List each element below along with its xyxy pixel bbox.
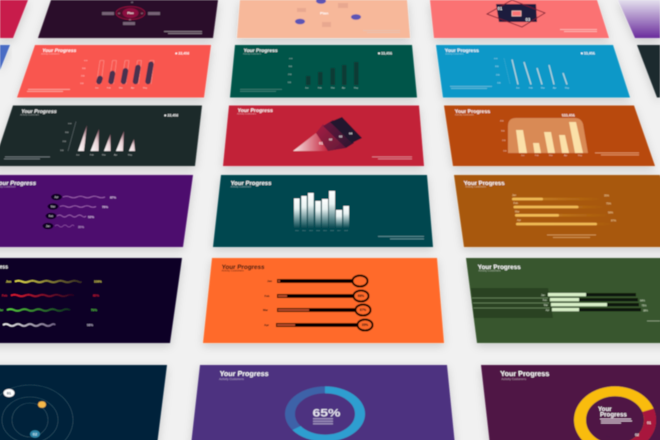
heading: Your Progress: [21, 109, 57, 115]
bar chart on rounded panel: Feb: [535, 155, 540, 157]
bar chart: 200: [288, 74, 292, 76]
value: $33,456: [561, 114, 575, 117]
panel: plum donut slide: [481, 365, 660, 440]
axis labels: 2015: [323, 230, 327, 232]
footnote: [164, 31, 202, 34]
heading: Activity Customers: [478, 269, 501, 272]
month pills: Mar: [51, 204, 55, 208]
donut value: 65%: [312, 408, 341, 420]
horizontal bars: 38%: [643, 310, 649, 312]
navy square with diamond outline: 01: [498, 6, 503, 11]
bar chart on rounded panel: 100: [503, 150, 507, 152]
bar chart: [80, 60, 154, 90]
month pills: Apr: [54, 195, 59, 199]
cone chart: Mar: [102, 154, 106, 156]
heading: Your Progress: [219, 369, 269, 378]
bar chart: 200: [81, 76, 85, 78]
cone chart: Jan: [76, 154, 80, 156]
panel: violet donut slide: [191, 365, 455, 440]
panel: ochre horizontal bars slide: [454, 175, 660, 247]
panel: purple wave slide: [0, 175, 193, 247]
value: ■ 33,456: [580, 52, 595, 55]
bar chart: 100: [288, 82, 292, 84]
footnote: [560, 29, 597, 32]
planets: 02: [33, 432, 38, 436]
bar chart on rounded panel: 300: [501, 130, 505, 132]
percentages: 52%: [88, 215, 94, 219]
horizontal bar chart: Apr: [517, 218, 521, 222]
heading: Your Progress: [445, 48, 479, 54]
lollipop bars: 35%: [362, 323, 368, 327]
cone chart: May: [128, 154, 133, 156]
lollipop bars: 68%: [358, 294, 364, 298]
bar chart on rounded panel: 200: [502, 140, 506, 142]
radial diagram: [102, 2, 160, 25]
bar chart: 400: [289, 58, 293, 60]
lollipop bars: Jan: [267, 279, 272, 283]
month pills: Feb: [49, 214, 54, 218]
footnote: [547, 234, 596, 238]
radial diagram: 02: [141, 13, 143, 15]
bar chart: Mar: [119, 86, 123, 90]
yellow and red donut: [580, 391, 650, 440]
value: ■ 33,456: [164, 114, 179, 117]
cone chart: Apr: [114, 154, 118, 156]
heading: Activity Customers: [237, 113, 257, 115]
panel: coral bar chart slide: [17, 45, 211, 98]
bar chart: Feb: [107, 88, 112, 90]
radial diagram: Plan: [127, 11, 134, 15]
layered triangle diagram: 03: [339, 134, 343, 138]
segment numbers: 01: [647, 421, 651, 425]
wave chart: [55, 196, 105, 227]
panel: plum radial slide: [38, 0, 218, 38]
footnote: [378, 236, 424, 239]
horizontal bars: [471, 288, 649, 318]
heading: Activity Customers: [221, 269, 245, 272]
heading: Your Progress: [243, 48, 278, 54]
thin bar chart: [494, 58, 570, 90]
donut chart 65 percent: [290, 390, 360, 438]
thin bar chart: 200: [496, 74, 500, 76]
segment numbers: 02: [635, 433, 639, 437]
axis labels: 2012: [302, 230, 306, 232]
bar chart: May: [354, 88, 359, 90]
bar chart on rounded panel: [500, 118, 588, 157]
footnote: [647, 320, 660, 322]
panel: salmon diamond slide: [430, 0, 609, 38]
heading: Your Progress: [230, 181, 272, 187]
horizontal bar chart: 87%: [611, 218, 617, 222]
bar chart on rounded panel: 400: [500, 120, 504, 122]
layered triangle diagram: 02: [329, 138, 333, 142]
axis labels: [295, 230, 348, 232]
radial diagram: 01: [129, 20, 131, 22]
bar chart: May: [143, 88, 148, 90]
layered triangle diagram: 04: [349, 132, 353, 136]
panel: crimson triangle slide: [223, 106, 424, 166]
panel: orange lollipop slide: [203, 258, 444, 343]
bar chart: Jan: [95, 88, 99, 90]
bar chart on rounded panel: Mar: [549, 154, 553, 157]
lollipop bars: Mar: [263, 308, 269, 312]
panel: cyan thin bar slide: [436, 45, 630, 98]
value: ■ 33,456: [175, 52, 190, 55]
value: ■ 33,456: [378, 52, 392, 55]
horizontal bar chart: 58%: [608, 210, 614, 214]
horizontal bars: 64%: [640, 300, 646, 302]
heading: Activity Customers: [230, 186, 252, 188]
panel: dark cone chart slide: [0, 106, 202, 166]
labels: [0, 280, 102, 327]
navy square with diamond outline: [487, 0, 545, 27]
thin bar chart: 300: [495, 66, 499, 68]
footnote: [372, 156, 412, 159]
percentages: [78, 196, 116, 229]
donut value: [312, 408, 341, 424]
axis labels: 2014: [316, 230, 320, 232]
horizontal bars: Jan: [541, 294, 546, 297]
horizontal bar chart: Feb: [514, 201, 519, 205]
footnote: [4, 156, 50, 159]
donut center text: Your: [598, 406, 612, 413]
bar chart: Apr: [342, 86, 346, 90]
network nodes: [295, 0, 361, 27]
bar chart: 300: [82, 68, 86, 70]
network nodes: Plan: [320, 10, 329, 16]
horizontal bar chart: Mar: [515, 210, 520, 214]
axis labels: 2013: [309, 230, 313, 232]
layered triangle diagram: 01: [319, 142, 323, 146]
labels: Jan: [6, 280, 11, 284]
bar chart: Feb: [318, 88, 323, 90]
bar chart: [288, 58, 359, 90]
segment numbers: [606, 421, 651, 439]
heading: Activity Customers: [445, 53, 465, 55]
thin bar chart: Feb: [529, 88, 534, 90]
heading: Your Progress: [42, 48, 77, 54]
footnote: [240, 89, 282, 92]
layered triangle diagram: [293, 117, 362, 151]
panel: navy glowing wave slide: [0, 258, 182, 343]
horizontal bars: 75%: [642, 304, 647, 308]
panel: forest green stacked bars slide: [466, 258, 660, 343]
bar chart: 300: [288, 66, 293, 68]
cone chart: 400: [68, 123, 72, 125]
panel: peach network slide: [237, 0, 410, 38]
labels: 58%: [87, 323, 93, 327]
horizontal bars: Feb: [543, 299, 548, 302]
thin bar chart: May: [565, 88, 570, 90]
footnote: [595, 152, 639, 155]
bar chart on rounded panel: May: [578, 155, 583, 157]
lollipop bars: Apr: [264, 323, 270, 327]
horizontal bar chart: [512, 193, 617, 225]
lollipop bars: [263, 276, 372, 330]
footnote: [27, 89, 70, 92]
bar chart: 100: [80, 83, 84, 85]
planets: [4, 389, 46, 438]
labels: Feb: [2, 294, 8, 298]
planets: 01: [7, 390, 12, 396]
labels: 100%: [94, 280, 102, 284]
radial diagram: 04: [118, 13, 120, 15]
thin bar chart: 100: [497, 82, 501, 84]
bar chart: 400: [84, 60, 88, 62]
heading: Activity Customers: [501, 377, 527, 381]
thin bar chart: 400: [494, 58, 498, 60]
thin bar chart: Jan: [516, 88, 520, 90]
labels: 82%: [93, 294, 99, 298]
heading: Your Progress: [477, 264, 522, 271]
cone chart: [60, 122, 135, 156]
percentages: 35%: [78, 225, 84, 229]
donut center text: Progress: [600, 412, 627, 418]
month pills: [42, 194, 62, 229]
panel: green bar chart slide: [230, 45, 417, 98]
thin bar chart: Apr: [553, 86, 557, 90]
panel: dark slide edge: [637, 45, 660, 98]
panel: rust bar chart slide: [444, 106, 655, 166]
bar chart: Apr: [131, 86, 135, 90]
percentages: 87%: [110, 196, 116, 200]
orbit rings: [0, 385, 73, 440]
horizontal bars: Mar: [544, 304, 548, 307]
horizontal bar chart: 35%: [604, 194, 610, 198]
heading: Your Progress: [455, 109, 491, 115]
bar chart: Mar: [331, 86, 335, 90]
cone chart: Feb: [90, 154, 95, 156]
footnote: [450, 86, 492, 89]
heading: Activity Customers: [20, 114, 40, 116]
gradient bar chart: [294, 191, 349, 228]
axis labels: 2018: [344, 230, 348, 232]
heading: Activity Customers: [243, 53, 262, 55]
axis labels: 2016: [330, 230, 334, 232]
lollipop bars: Feb: [265, 294, 270, 298]
heading: Activity Customers: [455, 114, 475, 116]
cone chart: 100: [60, 150, 64, 152]
panel: crimson slide, top left: [0, 0, 28, 38]
wave lines: [3, 281, 81, 326]
cone chart: 300: [65, 132, 69, 134]
heading: Activity Customers: [219, 377, 245, 381]
heading: Your Progress: [221, 264, 265, 271]
panel: blue slide edge: [0, 45, 10, 70]
labels: 79%: [91, 308, 97, 312]
footnote: [363, 30, 400, 33]
thin bar chart: Mar: [541, 86, 545, 90]
heading: Activity Customers: [41, 53, 60, 55]
bar chart on rounded panel: Apr: [564, 154, 568, 157]
panel: teal gradient bars slide: [213, 175, 433, 247]
radial diagram: 03: [131, 2, 133, 4]
panel: gradient purple slide: [618, 0, 660, 38]
axis labels: 2017: [337, 230, 341, 232]
heading: Activity Customers: [465, 186, 487, 188]
donut center text: [598, 406, 632, 424]
segment numbers: 03: [606, 435, 610, 439]
horizontal bars: Apr: [546, 309, 550, 312]
month pills: Jan: [46, 224, 51, 228]
bar chart: Jan: [305, 88, 309, 90]
navy square with diamond outline: 03: [526, 17, 531, 22]
heading: Your Progress: [500, 369, 550, 378]
percentages: 78%: [102, 205, 108, 209]
axis labels: 2011: [295, 230, 299, 232]
heading: Your Progress: [237, 108, 273, 114]
panel: deep navy orbit slide: [0, 365, 167, 440]
horizontal bar chart: 75%: [606, 202, 612, 206]
bar chart on rounded panel: Jan: [521, 155, 525, 157]
lollipop bars: 87%: [360, 308, 366, 312]
heading: Your Progress: [463, 181, 506, 187]
cone chart: 200: [62, 141, 67, 143]
horizontal bar chart: Jan: [512, 193, 517, 197]
